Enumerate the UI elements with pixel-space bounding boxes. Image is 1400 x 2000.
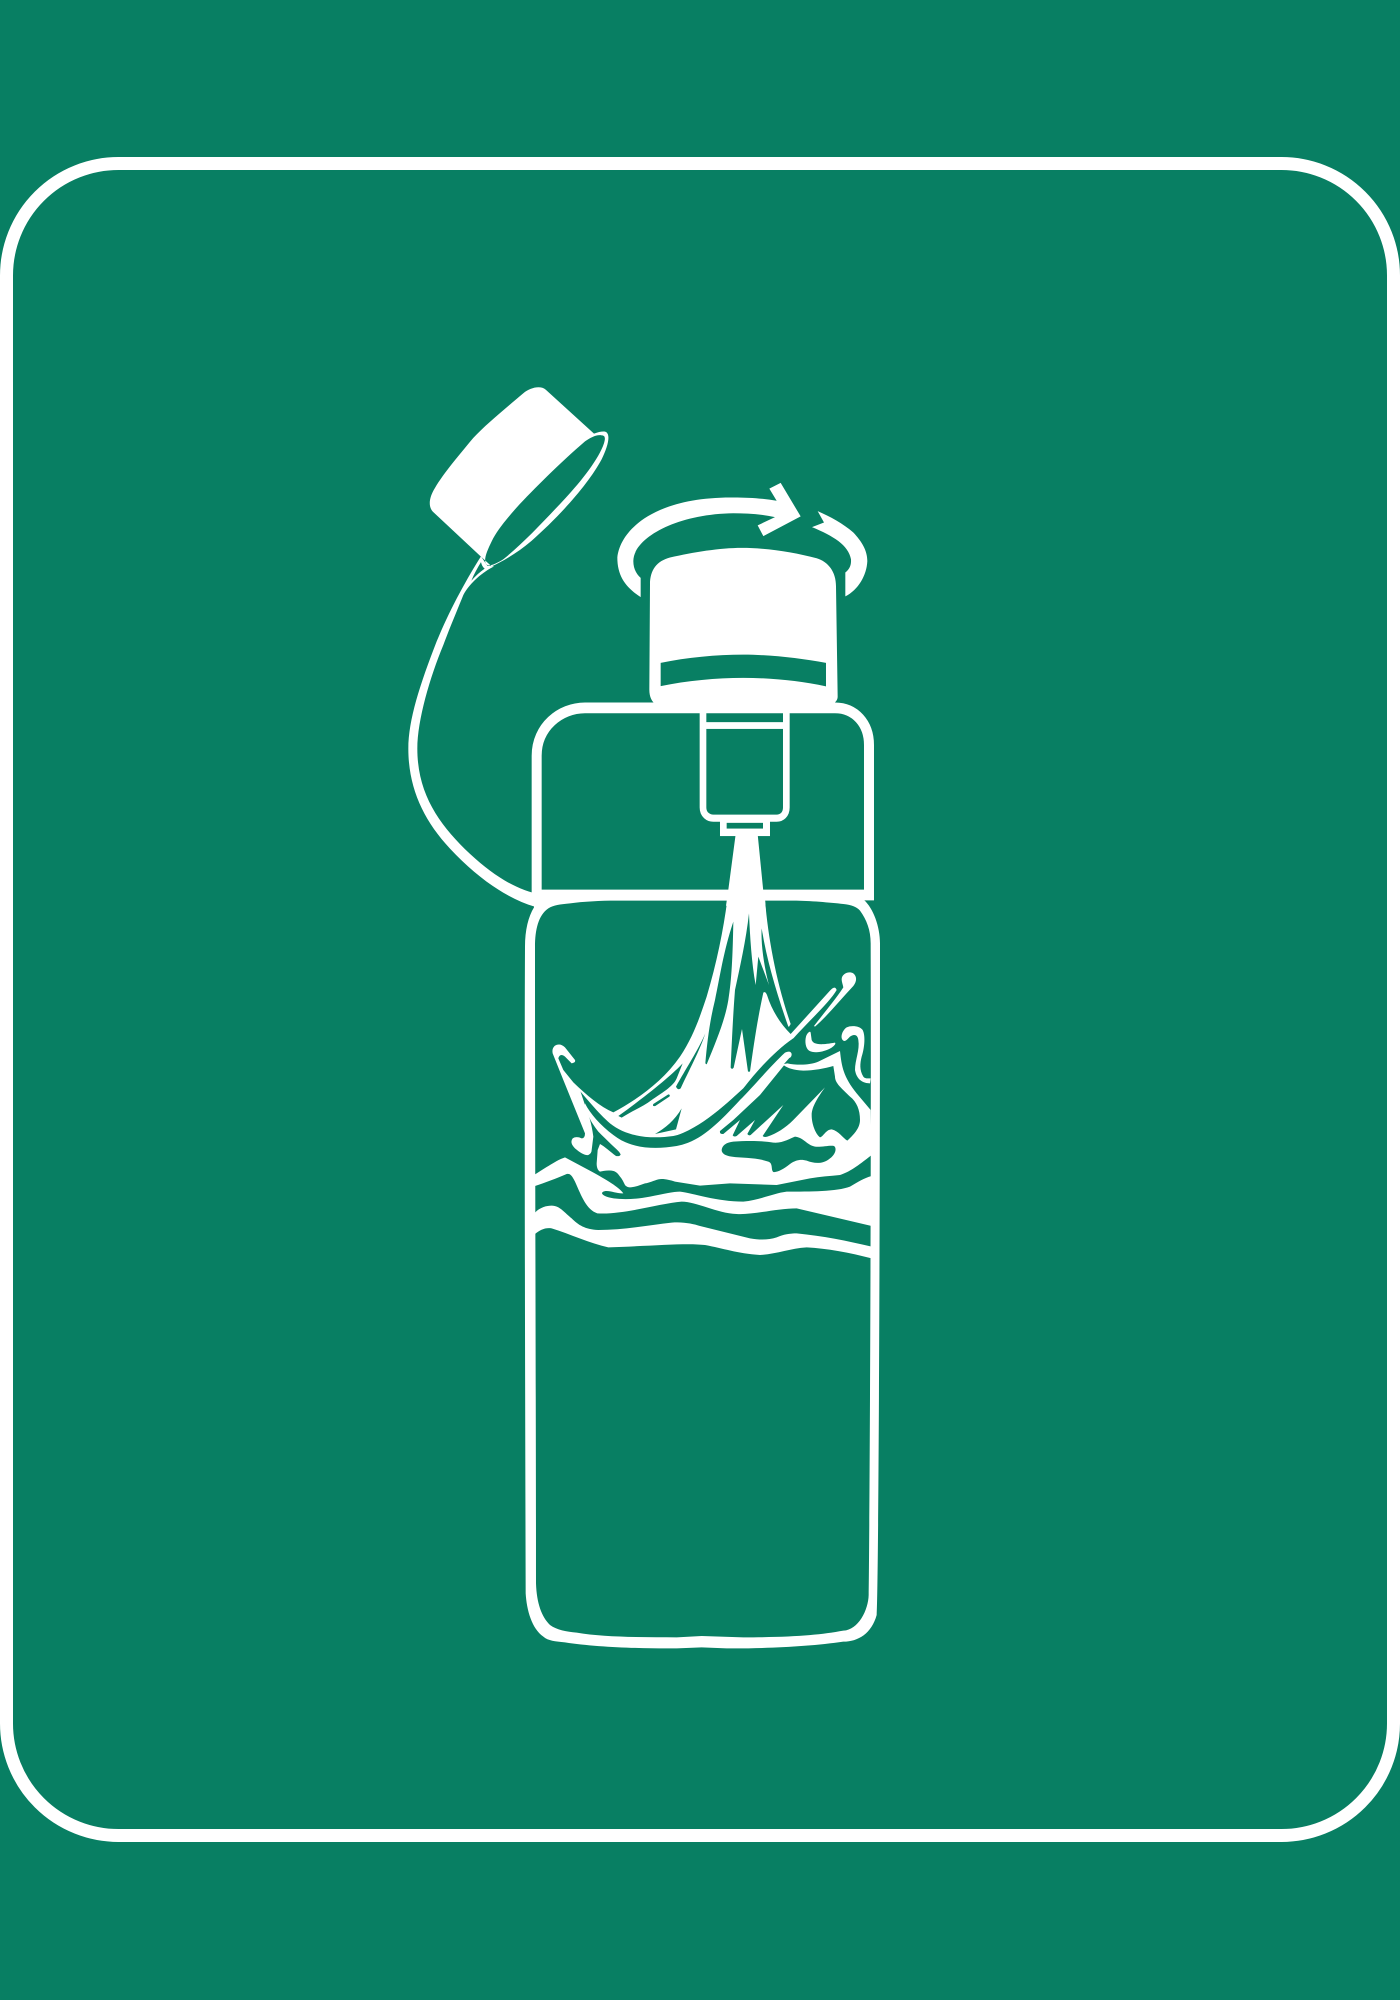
bottle lower parts [525,897,880,1648]
icon: tilted open cap [430,387,608,566]
splash left arm and hook [552,1044,593,1155]
splash mass with waves [535,972,872,1258]
neck outline [537,708,869,895]
wave one [535,1157,872,1226]
tether strap [408,556,535,907]
splash green pocket [720,1065,860,1141]
splash fan and stream [573,900,837,1139]
illustration: bottle with tethered cap [408,387,880,1648]
arrow: twist left arc [617,483,801,597]
stream from tube [726,834,765,906]
bottle body outline [525,897,880,1648]
stream overlap with body top [726,898,766,913]
closed cap [649,548,838,705]
wave two [535,1206,872,1258]
inner tube [703,709,786,836]
arrow: twist right arc [812,511,867,596]
splash crescent gap [574,1038,810,1163]
splash lake [722,1137,836,1172]
bottle upper parts [408,387,869,907]
splash hook and drops [842,1026,871,1083]
